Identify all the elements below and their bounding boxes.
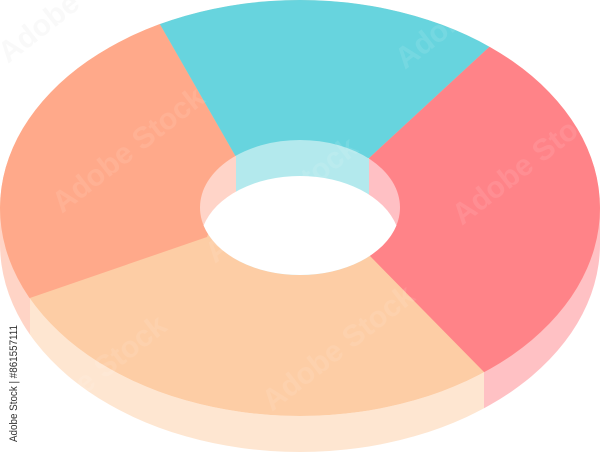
stock id label: Adobe Stock | #861557111 (8, 325, 20, 442)
watermarks: Adobe Stock (256, 278, 421, 418)
watermarks: Adobe Stock (46, 80, 211, 220)
hole opening (204, 176, 396, 275)
centre hole (200, 140, 400, 275)
segment: red (369, 46, 600, 372)
inner wall: teal (236, 140, 369, 275)
side wall: red segment (484, 212, 600, 408)
side wall: orange segment (0, 212, 30, 334)
segment: teal (160, 0, 490, 158)
inner wall: red (369, 158, 400, 256)
watermarks: Adobe Stock (199, 130, 364, 270)
outer side wall (0, 208, 600, 452)
inner wall: orange (200, 156, 236, 260)
side wall: peach segment (30, 298, 484, 452)
segment: orange (0, 24, 236, 298)
watermarks: Adobe Stock (8, 308, 173, 448)
